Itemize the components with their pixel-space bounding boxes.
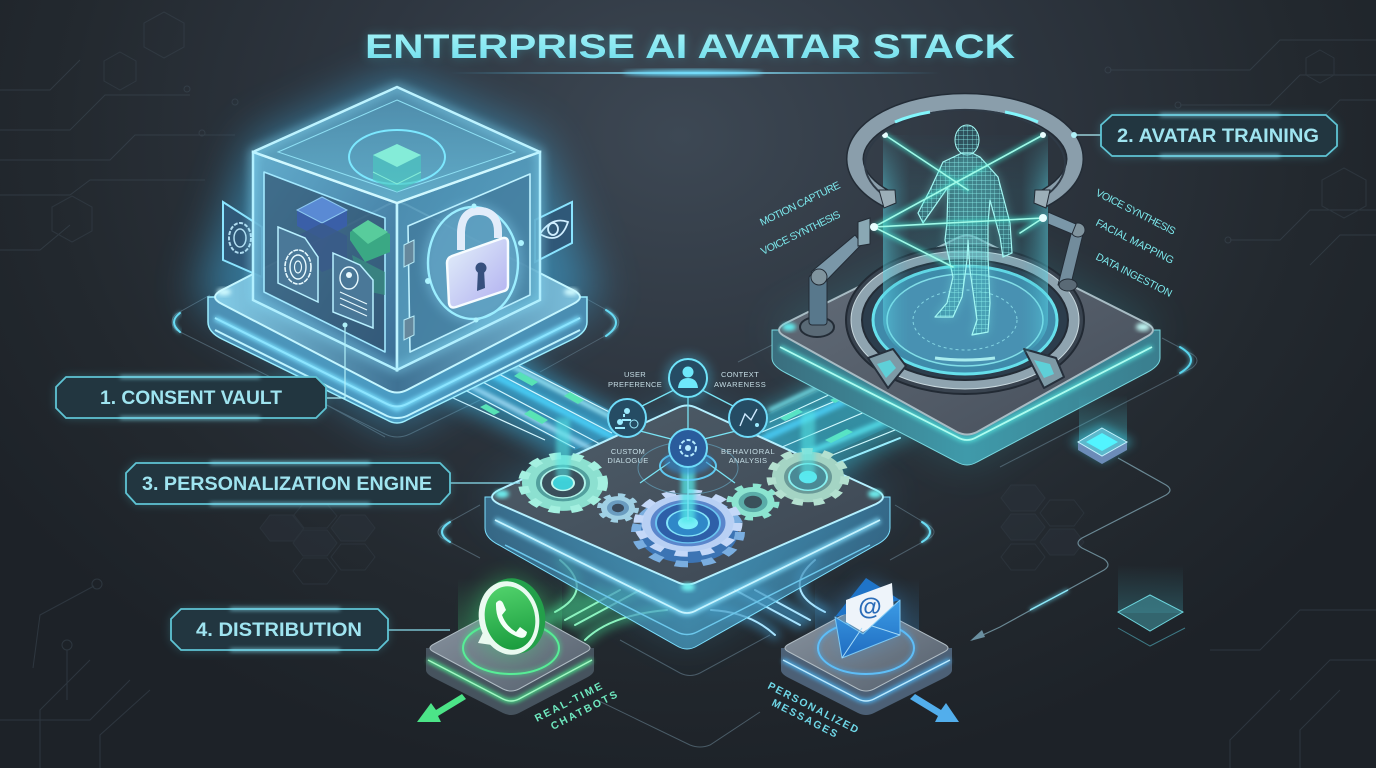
hexagon cluster right: [1001, 485, 1084, 570]
platform glow: [772, 233, 1160, 465]
label: 2 avatar training: 2. AVATAR TRAINING: [1117, 126, 1319, 147]
whatsapp platform: [426, 605, 594, 715]
capture labels: MOTION CAPTURE: [758, 179, 842, 229]
gear: left: [523, 456, 603, 510]
icon: email envelope: [835, 578, 900, 658]
label: 4 distribution: [171, 609, 450, 650]
label: personalized messages: PERSONALIZED: [766, 680, 861, 736]
document: profile: [333, 253, 373, 328]
hologram cylinder: [883, 135, 1048, 368]
vault cube top face: [253, 87, 540, 203]
vault cube left face: [253, 152, 397, 370]
engine platform: [485, 406, 890, 649]
holographic core: [349, 130, 445, 192]
node: behavioral analysis: [729, 399, 767, 437]
node: custom dialogue: [608, 399, 646, 437]
channel: whatsapp: [417, 572, 619, 733]
robot arm right: [1048, 212, 1085, 291]
title: ENTERPRISE AI AVATAR STACK: [365, 28, 1016, 66]
capture labels: FACIAL MAPPING: [1094, 217, 1176, 267]
gear: main: [636, 492, 740, 564]
base clamps: [868, 349, 1064, 388]
label: real-time chatbots: CHATBOTS: [549, 689, 619, 733]
top scanner ring: [855, 102, 1075, 200]
network labels: ANALYSIS: [729, 456, 767, 465]
light columns: [556, 410, 815, 523]
panel: avatar training: [758, 102, 1177, 465]
network labels: [607, 370, 775, 465]
label: 3 personalization engine: 3. PERSONALIZATION ENGINE: [142, 474, 432, 495]
network labels: USER: [624, 370, 646, 379]
label: 2 avatar training: [1071, 115, 1337, 156]
vault cube right face: [397, 152, 540, 370]
capture labels: [758, 179, 1177, 300]
network labels: AWARENESS: [714, 380, 766, 389]
network labels: DIALOGUE: [607, 456, 649, 465]
network labels: PREFERENCE: [608, 380, 662, 389]
data blocks: [297, 197, 390, 295]
label: personalized messages: MESSAGES: [770, 697, 839, 740]
title underline: [450, 70, 940, 76]
ground outline bright accents: [174, 310, 1191, 542]
label: 3 personalization engine: [126, 463, 520, 504]
engine glow: [485, 403, 890, 640]
gear: small left: [600, 495, 636, 521]
base rings: [846, 246, 1084, 394]
icon: email envelope: @: [858, 594, 882, 621]
data stream: avatar to engine: [735, 365, 935, 495]
whatsapp beam: [458, 578, 562, 650]
panel: consent vault: [195, 75, 600, 430]
label: real-time chatbots: REAL-TIME: [533, 680, 604, 725]
network labels: CUSTOM: [611, 447, 645, 456]
padlock icon: [423, 203, 524, 323]
vault base: [208, 202, 587, 423]
channel: email: [766, 578, 959, 740]
panel: personalization engine: [485, 354, 890, 649]
node tiles and return arrow: [970, 395, 1185, 646]
green stream to whatsapp: [540, 560, 667, 640]
icon: whatsapp: [472, 572, 552, 660]
capture labels: DATA INGESTION: [1094, 251, 1174, 300]
node tile: faint: [1118, 565, 1185, 646]
gear: right: [771, 451, 845, 503]
title: ENTERPRISE AI AVATAR STACK: [365, 28, 1016, 66]
gear: small right: [730, 486, 776, 518]
ring end caps: [879, 190, 1050, 208]
side card: fingerprint: [223, 202, 262, 277]
network labels: BEHAVIORAL: [721, 447, 775, 456]
platform: [772, 236, 1160, 465]
hexagon cluster left: [260, 504, 375, 584]
holographic body mesh: [918, 125, 1012, 335]
ground guide outlines: [172, 295, 1197, 747]
laser beams: [870, 132, 1047, 267]
network labels: CONTEXT: [721, 370, 759, 379]
output arrow: green: [417, 694, 466, 722]
robot arm left: [800, 218, 870, 337]
blue stream to email: [711, 560, 825, 635]
network links: [640, 390, 736, 520]
node: user preference: [664, 354, 712, 402]
node tile: bright: [1070, 395, 1134, 464]
email platform: [781, 605, 952, 715]
side card: eye: [535, 202, 572, 262]
email beam: [815, 578, 919, 650]
capture labels: VOICE SYNTHESIS: [759, 209, 843, 258]
capture labels: VOICE SYNTHESIS: [1094, 187, 1177, 238]
door hinges: [404, 240, 414, 340]
label: real-time chatbots: [533, 680, 619, 733]
data stream: vault to engine: [420, 330, 650, 470]
node: central core: [664, 429, 712, 474]
label: 1 consent vault: [56, 322, 348, 418]
label: 1 consent vault: 1. CONSENT VAULT: [100, 388, 282, 409]
vault glow: [195, 75, 600, 430]
label: 4 distribution: 4. DISTRIBUTION: [196, 620, 362, 641]
document: fingerprint: [278, 227, 318, 302]
output arrow: blue: [910, 694, 959, 722]
